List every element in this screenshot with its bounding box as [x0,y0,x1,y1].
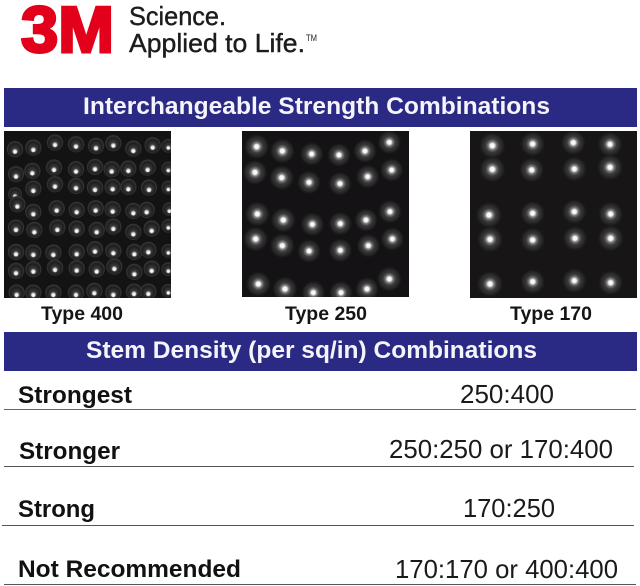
photo: Type 400 stem pattern [4,131,177,301]
row: Strongest: 250:400 [460,379,554,409]
photo: Type 250 stem pattern [242,130,409,305]
row: Strongest: Strongest [18,382,132,409]
row: Strong [2,493,634,526]
photo: Type 170 stem pattern [470,130,637,298]
banner: Stem Density (per sq/in) Combinations: Stem Density (per sq/in) Combinations [86,337,537,364]
row: Strong: Strong [18,496,95,523]
row: Not Recommended: Not Recommended [18,556,241,583]
banner: Interchangeable Strength Combinations: Interchangeable Strength Combinations [83,93,550,120]
row: Stronger: 250:250 or 170:400 [389,434,613,464]
row: Strong: 170:250 [463,493,555,523]
caption: Type 250: Type 250 [285,303,367,325]
caption: Type 170: Type 170 [510,303,592,325]
row: Not Recommended [4,554,636,584]
row: Strongest [4,379,636,410]
tagline: Science. Applied to Life.: Applied to Life. [129,28,305,58]
row: Not Recommended: 170:170 or 400:400 [395,554,618,584]
tagline: Science. Applied to Life.: TM [306,33,317,43]
caption: Type 400: Type 400 [41,303,123,325]
banner: Interchangeable Strength Combinations [4,88,637,127]
banner: Stem Density (per sq/in) Combinations [4,332,637,371]
row: Stronger: Stronger [19,438,120,465]
row: Stronger [4,434,634,466]
tagline: Science. Applied to Life.: Science. [129,1,226,31]
tagline: Science. Applied to Life. [129,1,317,58]
